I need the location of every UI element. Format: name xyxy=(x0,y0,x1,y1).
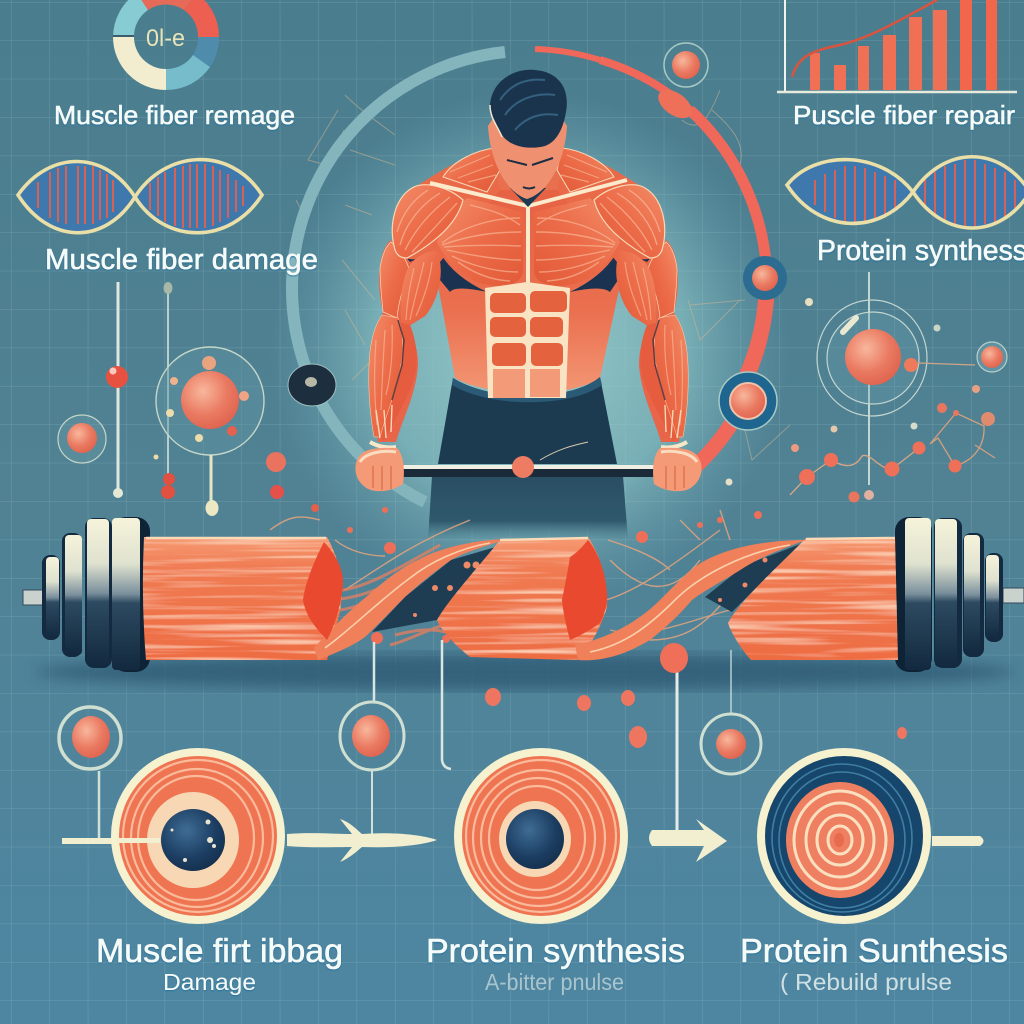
caption 3 title: Protein Sunthesis xyxy=(740,932,1008,969)
circle 3: rebuild xyxy=(761,752,927,920)
cylinder top highlights xyxy=(146,538,895,540)
under-pectoral shadow xyxy=(405,247,652,292)
torn fiber openings xyxy=(303,540,607,640)
torso xyxy=(438,190,620,393)
hair xyxy=(490,70,567,148)
barbell with damaged muscle fiber xyxy=(23,517,1024,672)
dna helix left xyxy=(18,160,262,233)
ring: coral arc xyxy=(535,49,767,466)
label: muscle fiber damage: Muscle fiber damage xyxy=(45,244,318,276)
label: puscle fiber repair: Puscle fiber repair xyxy=(793,100,1015,130)
left fist xyxy=(355,448,404,491)
circle 1: damage xyxy=(115,752,281,920)
dna helix right xyxy=(787,157,1024,228)
right fist xyxy=(653,448,702,491)
shorts xyxy=(438,377,617,464)
facial features xyxy=(507,158,553,188)
ring node: dark ball xyxy=(288,364,336,406)
twisted fiber bands xyxy=(314,539,806,660)
arrow stub left xyxy=(62,838,112,844)
arrow 1 xyxy=(287,819,437,862)
loose particles xyxy=(347,507,762,644)
muscle fiber cylinders xyxy=(143,537,898,660)
arrow stub right xyxy=(932,836,984,846)
caption 1 subtitle: Damage xyxy=(163,969,256,995)
bar centre ball xyxy=(512,456,534,478)
left upper body muscles xyxy=(369,148,523,447)
gauge value: 0l-e xyxy=(146,25,185,52)
caption 2 title: Protein synthesis xyxy=(426,932,685,969)
arrow 2 xyxy=(649,819,727,862)
cracks and fine lines xyxy=(296,90,790,460)
right weight plates xyxy=(895,517,1003,672)
bar chart: fiber repair xyxy=(777,0,1017,92)
small circle left xyxy=(59,707,121,838)
centre glow xyxy=(270,90,790,610)
drop and stem xyxy=(660,643,688,836)
chest V under chin xyxy=(510,188,546,207)
caption 1 title: Muscle firt ibbag xyxy=(96,932,343,969)
left bolt xyxy=(23,590,43,605)
muscular figure xyxy=(355,70,702,491)
gauge donut chart xyxy=(113,0,219,90)
right bolt xyxy=(1003,588,1024,603)
floating drops xyxy=(485,688,907,748)
left weight plates xyxy=(42,517,150,672)
ring node: top coral bulge xyxy=(653,84,697,124)
caption 3 subtitle: ( Rebuild prulse xyxy=(780,969,952,995)
face xyxy=(488,115,567,199)
collar bones and sternum xyxy=(430,180,627,284)
barbell ground shadow xyxy=(35,654,1015,690)
circle 2: synthesis xyxy=(458,752,624,920)
loose fiber bundles xyxy=(325,545,445,645)
neck xyxy=(484,150,573,212)
right upper body muscles xyxy=(534,148,688,447)
small circle middle xyxy=(340,702,404,835)
caption 2 subtitle: A-bitter pnulse xyxy=(485,969,624,995)
band highlights xyxy=(325,543,790,652)
stem lines and bubbles: left cluster xyxy=(58,282,319,516)
ring node: mid right xyxy=(743,256,787,300)
shadow behind lower figure xyxy=(428,476,628,540)
abs xyxy=(490,291,567,366)
ring node: top bubble xyxy=(664,43,708,87)
ring: teal arc xyxy=(292,52,505,502)
label: muscle fiber remage: Muscle fiber remage xyxy=(54,100,295,130)
dark tear gaps xyxy=(372,542,806,632)
strands between fibers xyxy=(270,510,730,640)
abdominal frame xyxy=(485,282,570,398)
bubbles and network: right cluster xyxy=(726,272,1007,502)
tear specks xyxy=(413,558,768,617)
small circle right xyxy=(701,714,761,774)
ring node: low right xyxy=(719,372,777,430)
lower abs xyxy=(493,369,560,398)
hanging stems xyxy=(374,640,731,769)
barbell bar xyxy=(368,465,690,477)
